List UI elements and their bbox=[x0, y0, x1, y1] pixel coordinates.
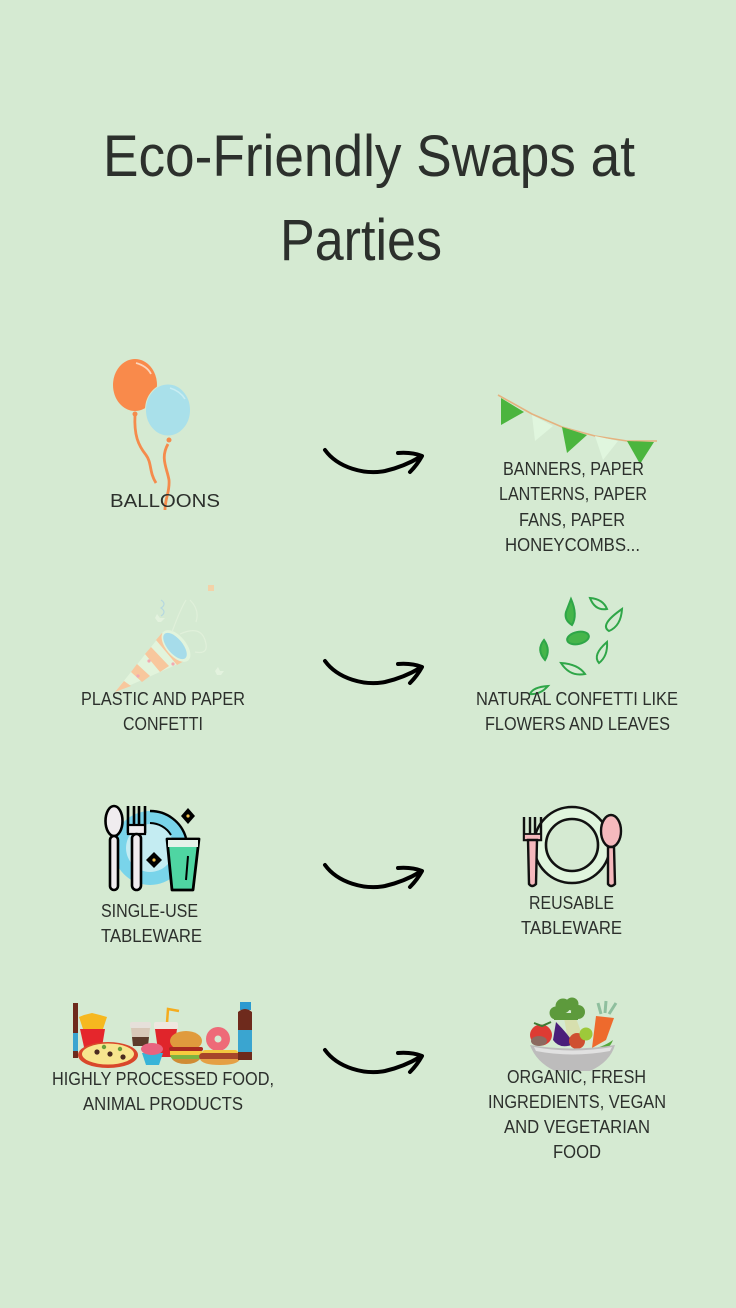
text: processed food: ANIMAL PRODUCTS bbox=[83, 1094, 243, 1114]
icon: bunting bbox=[498, 395, 657, 464]
text: reusable tableware bbox=[521, 893, 622, 938]
text: single-use tableware: TABLEWARE bbox=[101, 926, 202, 946]
arrow: tableware swap bbox=[325, 865, 422, 887]
text: natural confetti: NATURAL CONFETTI LIKE bbox=[476, 689, 678, 709]
text: natural confetti bbox=[476, 689, 678, 734]
text: organic food: ORGANIC, FRESH bbox=[507, 1067, 646, 1087]
text: banners: LANTERNS, PAPER bbox=[499, 484, 647, 504]
arrow: food swap bbox=[325, 1050, 422, 1072]
title: Parties bbox=[280, 208, 442, 273]
text: banners: BANNERS, PAPER bbox=[503, 459, 644, 479]
text: plastic confetti: CONFETTI bbox=[123, 714, 203, 734]
title bbox=[103, 124, 635, 273]
title: Eco-Friendly Swaps at bbox=[103, 124, 635, 189]
text: organic food bbox=[488, 1067, 666, 1162]
text: banners: HONEYCOMBS... bbox=[505, 535, 640, 555]
text: processed food bbox=[52, 1069, 274, 1114]
arrow: balloons swap bbox=[325, 450, 422, 472]
arrow: confetti swap bbox=[325, 661, 422, 683]
icon: fast food bbox=[73, 1002, 252, 1068]
text: natural confetti: FLOWERS AND LEAVES bbox=[485, 714, 670, 734]
text: banners bbox=[499, 459, 647, 555]
text: reusable tableware: TABLEWARE bbox=[521, 918, 622, 938]
text: organic food: FOOD bbox=[553, 1142, 601, 1162]
text: single-use tableware bbox=[101, 901, 202, 946]
icon: reusable tableware bbox=[524, 807, 621, 886]
text: plastic confetti: PLASTIC AND PAPER bbox=[81, 689, 245, 709]
text: plastic confetti bbox=[81, 689, 245, 734]
icon: confetti popper bbox=[115, 585, 224, 692]
text: processed food: HIGHLY PROCESSED FOOD, bbox=[52, 1069, 274, 1089]
text: banners: FANS, PAPER bbox=[519, 510, 625, 530]
text: balloons: BALLOONS bbox=[110, 491, 220, 511]
text: organic food: INGREDIENTS, VEGAN bbox=[488, 1092, 666, 1112]
text: reusable tableware: REUSABLE bbox=[529, 893, 614, 913]
text: single-use tableware: SINGLE-USE bbox=[101, 901, 198, 921]
text: organic food: AND VEGETARIAN bbox=[504, 1117, 650, 1137]
icon: leaves bbox=[530, 598, 622, 694]
icon: vegetable bowl bbox=[530, 998, 616, 1071]
icon: single-use tableware bbox=[106, 806, 199, 890]
icon: balloons bbox=[113, 359, 190, 510]
